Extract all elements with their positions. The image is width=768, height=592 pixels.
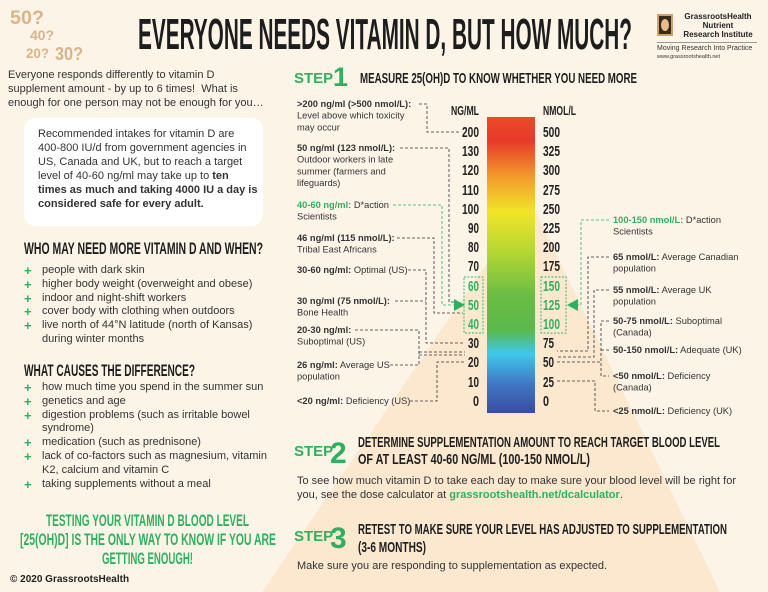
axis labels: 275 xyxy=(543,182,560,199)
left annotations: 30 ng/ml (75 nmol/L): xyxy=(297,296,390,306)
step 3 heading: 3 xyxy=(330,522,347,555)
axis labels: 60 xyxy=(468,278,479,295)
axis labels: 325 xyxy=(543,143,560,160)
decorative question numbers: 40? xyxy=(30,27,54,43)
axis labels: 50 xyxy=(468,297,479,314)
left annotations: >200 ng/ml (>500 nmol/L): xyxy=(297,99,411,109)
axis labels: 20 xyxy=(468,354,479,371)
icon: vitruvian xyxy=(657,14,673,36)
step 3 body: Make sure you are responding to supplementation as expected. xyxy=(297,560,607,572)
dashed leader lines xyxy=(355,104,609,411)
left annotations: 20-30 ng/ml: xyxy=(297,325,351,335)
axis labels: 150 xyxy=(543,278,560,295)
recommendation box: Recommended intakes for vitamin D are xyxy=(38,128,234,140)
logo: Moving Research Into Practice xyxy=(657,45,752,52)
axis labels: NMOL/L xyxy=(543,103,576,118)
axis labels: 200 xyxy=(462,124,479,141)
callout: testing: GETTING ENOUGH! xyxy=(102,549,193,568)
recommendation box: US, Canada and UK, but to reach a target xyxy=(38,156,242,168)
axis labels: 75 xyxy=(543,335,554,352)
decorative question numbers: 50? xyxy=(10,8,44,29)
target boxes xyxy=(464,277,566,333)
callout: testing: TESTING YOUR VITAMIN D BLOOD LEVEL xyxy=(46,511,249,530)
left annotations: Bone Health xyxy=(297,308,348,318)
left annotations: Outdoor workers in late xyxy=(297,155,393,165)
list: causes: lack of co-factors such as magnesium, vitamin K2, calcium and vitamin C xyxy=(42,450,267,476)
decorative question numbers: 20? xyxy=(26,45,49,61)
axis labels: 125 xyxy=(543,297,560,314)
right annotations: Scientists xyxy=(613,227,653,237)
axis labels: 300 xyxy=(543,162,560,179)
step 2 heading xyxy=(294,434,720,470)
right annotations: 50-75 nmol/L: Suboptimal xyxy=(613,316,722,326)
step 3 heading: (3-6 MONTHS) xyxy=(358,539,426,556)
step 2 heading: STEP xyxy=(294,443,333,460)
left annotations: <20 ng/ml: Deficiency (US) xyxy=(297,396,410,406)
color bar xyxy=(487,117,535,413)
recommendation box: 400-800 IU/d from government agencies in xyxy=(38,142,247,154)
recommendation box xyxy=(24,118,263,226)
step 1 heading xyxy=(294,62,637,92)
left annotations: Suboptimal (US) xyxy=(297,337,365,347)
decorative question numbers: 30? xyxy=(55,44,83,64)
logo: Research Institute xyxy=(683,30,753,39)
heading: who may need more: WHO MAY NEED MORE VITAMIN D AND WHEN? xyxy=(24,239,263,258)
list: causes: how much time you spend in the summer sun xyxy=(42,381,263,393)
axis labels: 25 xyxy=(543,374,554,391)
right annotations: population xyxy=(613,297,656,307)
axis labels: 40 xyxy=(468,316,479,333)
right annotations: 100-150 nmol/L: D*action xyxy=(613,215,721,225)
list: who: indoor and night-shift workers xyxy=(42,292,186,304)
recommendation box: level of 40-60 ng/ml may take up to ten xyxy=(38,170,229,182)
list: who: cover body with clothing when outdoors xyxy=(42,305,235,317)
right annotations: population xyxy=(613,264,656,274)
intro text: Everyone responds differently to vitamin D xyxy=(8,69,214,81)
step 1 heading: STEP xyxy=(294,70,333,87)
list: who: higher body weight (overweight and obese) xyxy=(42,278,252,290)
list: who: live north of 44°N latitude (north of Kansas) during winter months xyxy=(42,319,252,345)
left annotations: Level above which toxicity xyxy=(297,111,405,121)
left annotations: Tribal East Africans xyxy=(297,245,377,255)
logo xyxy=(657,12,757,60)
right annotations: <50 nmol/L: Deficiency xyxy=(613,371,710,381)
list: causes: genetics and age xyxy=(42,395,126,407)
list: causes: medication (such as prednisone) xyxy=(42,436,201,448)
axis labels: 110 xyxy=(462,182,479,199)
axis labels xyxy=(451,103,576,410)
axis labels: 500 xyxy=(543,124,560,141)
axis labels: 200 xyxy=(543,239,560,256)
left annotations: lifeguards) xyxy=(297,178,340,188)
left annotations xyxy=(297,99,411,406)
axis labels: 80 xyxy=(468,239,479,256)
intro text: enough for one person may not be enough for you… xyxy=(8,97,264,109)
axis labels: 90 xyxy=(468,220,479,237)
left annotations: 30-60 ng/ml: Optimal (US) xyxy=(297,265,408,275)
right annotations: 65 nmol/L: Average Canadian xyxy=(613,252,738,262)
axis labels: NG/ML xyxy=(451,103,479,118)
step 2 body: To see how much vitamin D to take each day to make sure your blood level will be right for xyxy=(297,475,736,487)
intro text xyxy=(8,69,264,109)
axis labels: 130 xyxy=(462,143,479,160)
axis labels: 120 xyxy=(462,162,479,179)
callout: testing xyxy=(20,511,276,568)
right annotations xyxy=(613,215,742,416)
heading: causes: WHAT CAUSES THE DIFFERENCE? xyxy=(24,361,195,380)
axis labels: 100 xyxy=(543,316,560,333)
intro text: supplement amount - by up to 6 times! What is xyxy=(8,83,238,95)
axis labels: 0 xyxy=(543,393,549,410)
step 3 heading xyxy=(294,521,727,556)
logo: GrassrootsHealth xyxy=(684,12,752,21)
arrows xyxy=(454,299,465,311)
left annotations: 50 ng/ml (123 nmol/L): xyxy=(297,143,395,153)
axis labels: 175 xyxy=(543,258,560,275)
list: causes: taking supplements without a meal xyxy=(42,478,211,490)
list: who: people with dark skin xyxy=(42,264,145,276)
step 3 heading: STEP xyxy=(294,528,333,545)
left annotations: may occur xyxy=(297,122,340,132)
left annotations: 26 ng/ml: Average US xyxy=(297,360,390,370)
axis labels: 100 xyxy=(462,201,479,218)
left annotations: Scientists xyxy=(297,212,337,222)
copyright: © 2020 GrassrootsHealth xyxy=(10,574,129,585)
axis labels: 225 xyxy=(543,220,560,237)
right annotations: (Canada) xyxy=(613,383,652,393)
left annotations: population xyxy=(297,372,340,382)
axis labels: 70 xyxy=(468,258,479,275)
axis labels: 250 xyxy=(543,201,560,218)
callout: testing: [25(OH)D] IS THE ONLY WAY TO KNOW IF YOU ARE xyxy=(20,530,276,549)
axis labels: 50 xyxy=(543,354,554,371)
left annotations: 40-60 ng/ml: D*action xyxy=(297,200,389,210)
recommendation box: times as much and taking 4000 IU a day is xyxy=(38,184,257,196)
list: causes: digestion problems (such as irritable bowel syndrome) xyxy=(42,409,250,434)
axis labels: 0 xyxy=(473,393,479,410)
list: causes xyxy=(24,381,267,490)
logo: www.grassrootshealth.net xyxy=(657,54,720,60)
right annotations: <25 nmol/L: Deficiency (UK) xyxy=(613,406,732,416)
list: who xyxy=(24,264,252,345)
step 2 heading: OF AT LEAST 40-60 NG/ML (100-150 NMOL/L) xyxy=(358,451,590,468)
step 2 heading: 2 xyxy=(330,437,347,470)
right annotations: 55 nmol/L: Average UK xyxy=(613,285,712,295)
axis labels: 30 xyxy=(468,335,479,352)
right annotations: 50-150 nmol/L: Adequate (UK) xyxy=(613,345,742,355)
logo: Nutrient xyxy=(703,21,733,30)
step 2 body: you, see the dose calculator at grassrootshealth.net/dcalculator. xyxy=(297,489,623,501)
step 1 heading: 1 xyxy=(333,62,348,92)
axis labels: 10 xyxy=(468,374,479,391)
step 2 body xyxy=(297,475,736,501)
left annotations: summer (farmers and xyxy=(297,166,386,176)
left annotations: 46 ng/ml (115 nmol/L): xyxy=(297,233,395,243)
recommendation box: considered safe for every adult. xyxy=(38,198,204,210)
right annotations: (Canada) xyxy=(613,328,652,338)
decorative question numbers xyxy=(10,8,83,64)
